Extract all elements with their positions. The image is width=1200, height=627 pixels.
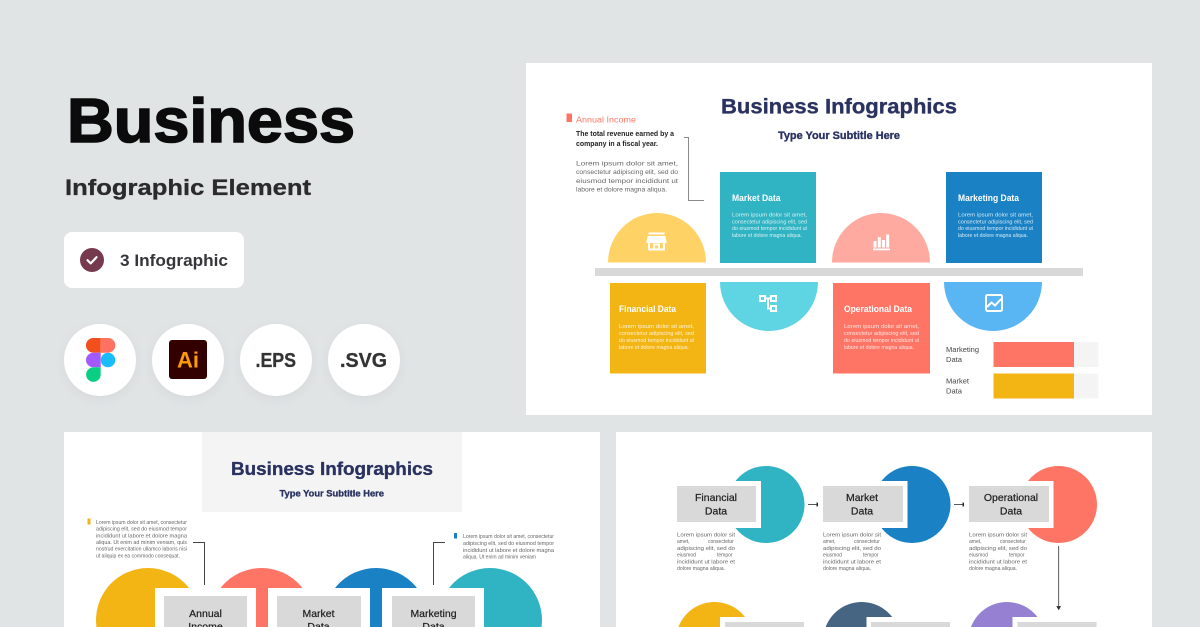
card: Operational Data: labore et dolore magna aliqua. <box>844 345 914 351</box>
icon: flow diagram <box>760 296 776 311</box>
card: Market Data: do eiusmod tempor incididunt ut <box>732 226 808 232</box>
bar chart: Market <box>946 376 970 386</box>
connector line <box>684 138 704 200</box>
circle: yellow <box>678 602 751 627</box>
text block: Market Data <box>823 532 882 572</box>
card: Annual Income: Annual <box>189 608 222 620</box>
text block: Operational Data: tempor <box>1009 553 1025 559</box>
card: Market Data: Data <box>851 506 873 518</box>
text block: Operational Data: amet, <box>969 539 982 545</box>
card: Market Data <box>268 588 370 627</box>
bar chart <box>946 342 1098 398</box>
circle: purple <box>971 602 1043 627</box>
arrow <box>808 503 820 506</box>
marker: left note <box>88 518 90 524</box>
text block: Financial Data: dolore magna aliqua. <box>677 566 725 572</box>
icon: line chart <box>986 295 1002 311</box>
timeline bar <box>595 268 1083 276</box>
card: Financial Data: Financial <box>695 492 737 504</box>
card: Market Data: Market <box>846 492 878 504</box>
text block: Operational Data <box>969 532 1028 572</box>
card: bottom left <box>720 617 809 627</box>
text block: right note <box>463 534 554 560</box>
text block: Annual Income body: consectetur adipiscing elit, sed do <box>576 169 678 176</box>
title block: Business Infographics <box>231 458 433 479</box>
text block: right note: adipiscing elit, sed do eiusmod tempor <box>463 541 554 547</box>
card: Operational Data: Data <box>1000 506 1022 518</box>
circle: blue <box>324 568 428 627</box>
marker: right note <box>454 533 457 538</box>
text block: left note: aliqua. Ut enim ad minim veniam, quis <box>96 540 188 546</box>
text block: Operational Data: incididunt ut labore et <box>969 559 1028 565</box>
marker: Annual Income <box>566 114 572 122</box>
text block: left note: incididunt ut labore et dolore magna <box>96 533 187 539</box>
icon: bar chart <box>873 234 890 250</box>
text block: Financial Data: amet, <box>677 539 690 545</box>
circle: red <box>210 568 314 627</box>
card: Operational Data <box>964 481 1054 528</box>
subtitle: Type Your Subtitle Here <box>778 130 900 142</box>
heading: Business: Business <box>67 87 355 156</box>
text block: Annual Income body: Lorem ipsum dolor sit amet, <box>576 160 678 168</box>
card: Marketing Data: consectetur adipiscing elit, sed <box>958 220 1033 226</box>
card: Marketing Data: labore et dolore magna aliqua. <box>958 233 1028 239</box>
text block: Financial Data: incididunt ut labore et <box>677 559 736 565</box>
circle: red <box>1020 466 1097 543</box>
text block: left note: ut aliquip ex ea commodo consequat. <box>96 553 180 559</box>
text block: Annual Income body: eiusmod tempor incididunt ut <box>576 178 678 185</box>
text block: Financial Data <box>677 532 736 572</box>
text block: Annual Income body <box>576 160 678 194</box>
circle: teal <box>438 568 542 627</box>
text block: left note: Lorem ipsum dolor sit amet, consectetur <box>96 520 187 526</box>
text block: Financial Data: tempor <box>717 553 733 559</box>
text block: Financial Data: adipiscing elit, sed do <box>677 546 735 552</box>
text block: left note: adipiscing elit, sed do eiusmod tempor <box>96 527 187 533</box>
text block: right note: incididunt ut labore et dolore magna <box>463 548 554 554</box>
connector: left <box>193 542 204 585</box>
card: Financial Data: Data <box>705 506 727 518</box>
card: Operational Data: consectetur adipiscing elit, sed <box>844 331 919 337</box>
callout: revenue definition: company in a fiscal year. <box>576 139 658 148</box>
text block: Market Data: Lorem ipsum dolor sit <box>823 532 882 538</box>
text block: left note <box>96 520 188 559</box>
callout: revenue definition: The total revenue earned by a <box>576 129 675 138</box>
bar chart: Marketing <box>946 345 979 354</box>
half circle: flow <box>720 282 818 331</box>
card: Market Data: Lorem ipsum dolor sit amet, <box>732 212 807 218</box>
subheading: Infographic Element: Infographic Element <box>65 175 312 200</box>
icon: EPS format: .EPS <box>256 350 296 372</box>
title block <box>202 432 462 512</box>
card: Financial Data: labore et dolore magna aliqua. <box>619 345 689 351</box>
icon: Adobe Illustrator <box>152 324 224 396</box>
text block: Market Data: adipiscing elit, sed do <box>823 546 881 552</box>
card: Market Data <box>818 481 908 528</box>
text block: Financial Data: eiusmod <box>677 553 696 559</box>
card: bottom right <box>1012 617 1102 627</box>
label: Annual Income: Annual Income <box>576 116 637 124</box>
card: Financial Data: Financial Data <box>619 304 677 314</box>
icon: store <box>648 234 666 250</box>
card: Market Data: Market Data <box>732 193 781 203</box>
text block: Market Data: amet, <box>823 539 836 545</box>
card: Operational Data <box>833 283 930 374</box>
bar chart: Data <box>946 355 963 364</box>
card: Marketing Data <box>946 172 1042 263</box>
badge: 3 Infographic <box>64 232 244 288</box>
title block: Type Your Subtitle Here <box>280 488 384 500</box>
card: Marketing Data <box>382 588 484 627</box>
card: Marketing Data: Marketing Data <box>958 193 1020 203</box>
card: bottom middle <box>866 617 956 627</box>
panel: process flow infographic <box>616 432 1152 627</box>
card: Financial Data <box>672 481 761 528</box>
icon: Figma <box>64 324 136 396</box>
text block: Market Data: dolore magna aliqua. <box>823 566 871 572</box>
arrow: downward <box>1057 546 1060 610</box>
card: Marketing Data: Marketing <box>410 608 457 620</box>
title: Business Infographics <box>721 94 957 118</box>
card: Market Data: Market <box>302 608 335 620</box>
text block: Market Data: eiusmod <box>823 553 842 559</box>
text block: Market Data: tempor <box>863 553 879 559</box>
card: Marketing Data: Lorem ipsum dolor sit amet, <box>958 212 1033 218</box>
card: Market Data: consectetur adipiscing elit, sed <box>732 220 807 226</box>
text block: Operational Data: Lorem ipsum dolor sit <box>969 532 1028 538</box>
panel: half-circle infographic <box>526 63 1152 415</box>
card: Operational Data: Operational Data <box>844 304 913 314</box>
text block: Market Data: consectetur <box>854 539 880 545</box>
card: Annual Income <box>155 588 256 627</box>
half circle: store <box>608 213 706 262</box>
card: Market Data <box>720 172 816 263</box>
icon: SVG format: .SVG <box>340 350 387 372</box>
card: Operational Data: Lorem ipsum dolor sit amet, <box>844 324 919 330</box>
connector: right <box>434 542 445 585</box>
card: Market Data: labore et dolore magna aliqua. <box>732 233 802 239</box>
card: Financial Data <box>610 283 706 374</box>
circle: yellow <box>96 568 200 627</box>
text block: Operational Data: eiusmod <box>969 553 988 559</box>
card: Operational Data: do eiusmod tempor incididunt ut <box>844 338 920 344</box>
text block: right note: aliqua. Ut enim ad minim veniam <box>463 554 536 560</box>
half circle: line chart <box>944 282 1042 331</box>
text block: Operational Data: adipiscing elit, sed do <box>969 546 1027 552</box>
text block: Annual Income body: labore et dolore magna aliqua. <box>576 186 667 194</box>
badge: 3 Infographic: 3 Infographic <box>120 251 228 270</box>
icon: EPS format <box>240 324 312 396</box>
card: Financial Data: do eiusmod tempor incididunt ut <box>619 338 695 344</box>
text block: right note: Lorem ipsum dolor sit amet, consectetur <box>463 534 554 540</box>
text block: Market Data: incididunt ut labore et <box>823 559 882 565</box>
text block: Financial Data: consectetur <box>708 539 734 545</box>
text block: Financial Data: Lorem ipsum dolor sit <box>677 532 736 538</box>
circle: slate <box>826 602 898 627</box>
panel: overlapping circles infographic <box>64 432 600 627</box>
circle: teal <box>728 466 804 543</box>
icon: Adobe Illustrator: Ai <box>177 348 199 373</box>
card: Operational Data: Operational <box>984 492 1038 504</box>
card: Marketing Data: do eiusmod tempor incididunt ut <box>958 226 1034 232</box>
text block: left note: nostrud exercitation ullamco laboris nisi <box>96 547 187 553</box>
text block: Operational Data: consectetur <box>1000 539 1026 545</box>
icon: SVG format <box>328 324 400 396</box>
bar chart: Data <box>946 386 963 396</box>
half circle: bar chart <box>832 213 930 262</box>
arrow <box>954 503 966 506</box>
card: Financial Data: Lorem ipsum dolor sit amet, <box>619 324 694 330</box>
circle: blue <box>874 466 950 543</box>
card: Financial Data: consectetur adipiscing elit, sed <box>619 331 694 337</box>
text block: Operational Data: dolore magna aliqua. <box>969 566 1017 572</box>
